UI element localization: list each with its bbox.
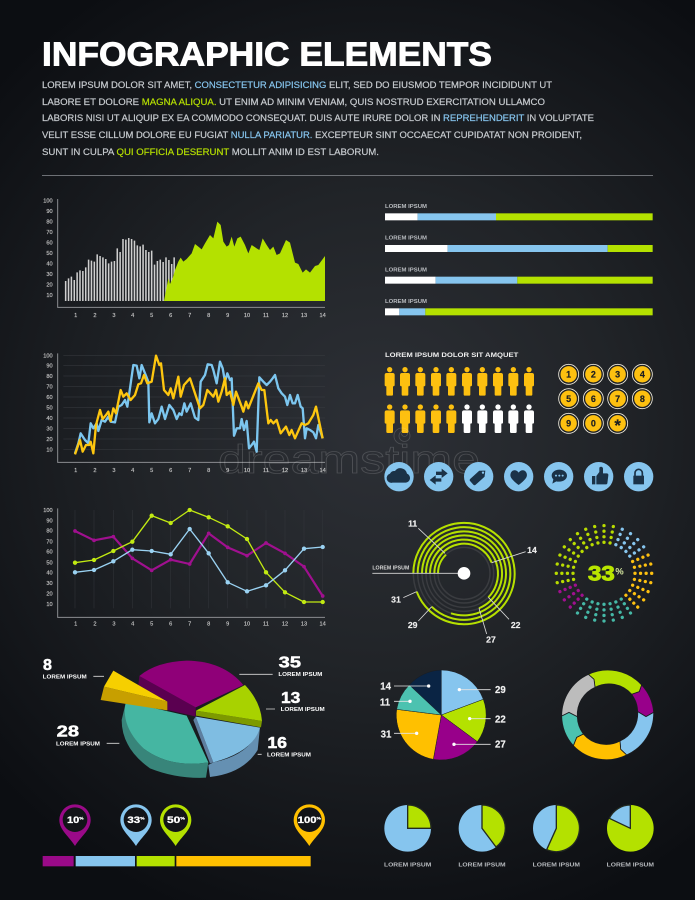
orange dots (626, 555, 652, 607)
y axis labels: 60 (46, 240, 53, 246)
y axis labels: 20 (46, 437, 53, 443)
callout dots (408, 684, 471, 746)
y axis labels: 90 (46, 209, 53, 215)
bar 1 (385, 213, 653, 220)
label 8 (43, 657, 87, 680)
x axis labels: 5 (150, 468, 153, 474)
ring values: 14 (527, 545, 537, 555)
lime series (75, 510, 323, 602)
donut: magenta segment (632, 685, 654, 717)
y axis labels: 100 (43, 353, 53, 359)
chart: three series with markers (43, 508, 326, 628)
y axis labels: 60 (46, 550, 53, 556)
callout values: 31 (381, 729, 392, 740)
x axis labels: 11 (263, 468, 269, 474)
keypad circles (560, 366, 651, 432)
keypad digits: * (614, 416, 621, 435)
watermark: dreamstime (218, 438, 480, 482)
mini pie 1 (384, 805, 431, 852)
ring values: 31 (391, 594, 401, 604)
donut: teal segment (562, 712, 583, 746)
pin: 100 percent: % (317, 816, 322, 821)
donut: orange segment (573, 734, 627, 760)
x axis labels: 8 (207, 622, 210, 628)
ring tracks (413, 523, 515, 624)
y axis labels: 100 (43, 199, 53, 205)
ring arcs (413, 523, 515, 624)
pin: 33 percent: 33 (127, 815, 137, 825)
pin: 50 percent: % (180, 816, 186, 821)
intro text block (42, 80, 594, 157)
keypad digits: 8 (640, 394, 645, 404)
x axis labels: 9 (226, 468, 229, 474)
keypad digits: 5 (566, 394, 571, 404)
yellow slice (101, 671, 167, 710)
segmented donut chart (562, 670, 654, 760)
keypad digits: 1 (566, 370, 571, 380)
x axis labels: 5 (150, 622, 153, 628)
x axis labels: 14 (320, 468, 326, 474)
blue slice (193, 717, 260, 777)
icon: price tag (464, 462, 493, 491)
x axis labels: 5 (150, 313, 153, 319)
pin: 33 percent (120, 804, 152, 846)
callout lines (394, 686, 491, 744)
label 35 (278, 654, 323, 678)
x axis labels: 2 (93, 313, 97, 319)
keypad digits: 9 (566, 419, 571, 429)
grid lines (63, 355, 325, 450)
keypad digits: 4 (640, 370, 645, 380)
ring values: 29 (408, 620, 418, 630)
pin: 10 percent (59, 804, 91, 846)
y axis labels: 50 (46, 560, 53, 566)
label 16: LOREM IPSUM (267, 752, 312, 758)
callout values: 29 (495, 685, 506, 696)
keypad digits: 2 (591, 370, 596, 380)
ring progress chart (372, 518, 537, 644)
mini pie 2 (459, 805, 505, 852)
bar 4 (385, 308, 653, 315)
x axis labels: 4 (131, 313, 134, 319)
ring values: 22 (511, 620, 521, 630)
lime area (164, 222, 325, 301)
teal slice (122, 702, 208, 778)
label 28 (56, 724, 101, 747)
axes (58, 199, 325, 307)
blue line (75, 362, 323, 453)
chart: two line series (43, 353, 326, 474)
mini pie 3 (533, 805, 580, 852)
dotted radial gauge (556, 525, 652, 621)
x axis labels: 11 (263, 313, 269, 319)
label 28: 28 (57, 724, 79, 741)
y axis labels: 60 (46, 395, 53, 401)
y axis labels: 40 (46, 261, 53, 267)
x axis labels: 6 (169, 468, 172, 474)
y axis labels: 80 (46, 374, 53, 380)
keypad digits: 7 (615, 394, 620, 404)
y axis labels: 10 (46, 293, 53, 299)
keypad outer rings (559, 364, 652, 433)
donut: lime segment (588, 670, 642, 694)
label 8: 8 (43, 657, 52, 674)
x axis labels: 4 (131, 622, 134, 628)
lime dots (556, 525, 613, 583)
x axis labels: 7 (188, 468, 191, 474)
label 28: LOREM IPSUM (56, 741, 101, 747)
label 8: LOREM IPSUM (43, 674, 87, 680)
mini pies row (384, 805, 654, 868)
y axis labels: 70 (46, 230, 53, 236)
icon row (384, 462, 653, 491)
pie leader lines (93, 674, 275, 754)
donut: blue segment (620, 712, 654, 755)
label 13 (281, 690, 325, 713)
magenta slice (138, 661, 243, 717)
bar labels: LOREM IPSUM (385, 299, 428, 305)
label 13: LOREM IPSUM (281, 707, 325, 713)
x axis labels: 12 (282, 313, 288, 319)
x axis labels: 3 (112, 313, 116, 319)
x axis labels: 10 (244, 622, 250, 628)
ring values: 11 (408, 518, 417, 528)
x axis labels: 4 (131, 468, 134, 474)
pin: 100 percent: 100 (298, 815, 313, 825)
label 16 (267, 735, 312, 758)
mini pie labels: LOREM IPSUM (607, 862, 654, 868)
y axis labels: 10 (46, 448, 53, 454)
x axis labels: 9 (226, 622, 229, 628)
x axis labels: 13 (301, 468, 307, 474)
x axis labels: 11 (263, 622, 269, 628)
pin: 50 percent (160, 804, 191, 846)
x axis labels: 2 (93, 468, 97, 474)
icon: heart (504, 462, 533, 491)
keypad digits: 3 (615, 370, 620, 380)
intro text block: SUNT IN CULPA QUI OFFICIA DESERUNT MOLLIT ANIM ID EST LABORUM. (42, 147, 379, 157)
label 35: 35 (279, 654, 301, 671)
y axis labels: 30 (46, 272, 53, 278)
x axis labels: 13 (301, 622, 307, 628)
mini pie labels: LOREM IPSUM (384, 862, 432, 868)
y axis labels: 50 (46, 406, 53, 412)
magenta series (75, 531, 323, 596)
bar labels: LOREM IPSUM (385, 236, 428, 242)
yellow line (75, 356, 323, 454)
progress bar (43, 856, 311, 866)
bar labels: LOREM IPSUM (385, 267, 428, 273)
y axis labels: 10 (46, 602, 53, 608)
y axis labels: 80 (46, 219, 53, 225)
y axis labels: 90 (46, 364, 53, 370)
icon: exchange arrows (424, 462, 453, 491)
bar 3 (385, 277, 653, 284)
bar labels (385, 204, 428, 305)
pin: 10 percent: 10 (67, 815, 77, 825)
mini pie labels (384, 862, 654, 868)
mini pie labels: LOREM IPSUM (533, 862, 580, 868)
watermark (218, 428, 480, 482)
blue series (75, 529, 323, 591)
intro text block: VELIT ESSE CILLUM DOLORE EU FUGIAT NULLA PARIATUR. EXCEPTEUR SINT OCCAECAT CUPIDATAT NON PROIDENT, (42, 130, 582, 140)
x axis labels: 9 (226, 313, 229, 319)
vertical grid lines (75, 510, 323, 608)
donut: gray segment (562, 674, 595, 717)
mini pie labels: LOREM IPSUM (458, 862, 506, 868)
heading: LOREM IPSUM DOLOR SIT AMQUET (385, 352, 518, 359)
x axis labels: 10 (244, 468, 250, 474)
callout values: 22 (495, 714, 506, 725)
pin: 10 percent: % (79, 816, 84, 821)
teal dots (577, 599, 631, 621)
y axis labels: 20 (46, 282, 53, 288)
callout values: 11 (380, 698, 391, 709)
ring values: 27 (486, 634, 496, 644)
gauge percentage: 33 (588, 561, 615, 586)
intro text block: LABORIS NISI UT ALIQUIP EX EA COMMODO CONSEQUAT. DUIS AUTE IRURE DOLOR IN REPREHENDERIT IN VOLUPTATE (42, 113, 594, 123)
3D exploded pie chart (43, 654, 325, 778)
label 35: LOREM IPSUM (278, 672, 323, 678)
stacked bars panel (385, 204, 653, 315)
x axis labels: 1 (74, 313, 77, 319)
y axis labels: 100 (43, 508, 53, 514)
label 16: 16 (267, 735, 287, 752)
x axis labels: 7 (188, 313, 191, 319)
y axis labels: 70 (46, 385, 53, 391)
pie slices (396, 670, 486, 760)
y axis labels: 20 (46, 592, 53, 598)
y axis labels: 90 (46, 518, 53, 524)
x axis labels: 14 (320, 313, 326, 319)
title: INFOGRAPHIC ELEMENTS (42, 36, 492, 72)
x axis labels: 8 (207, 468, 210, 474)
people and keypad panel (385, 352, 652, 435)
x axis labels: 1 (74, 622, 77, 628)
icon: speech bubble (544, 462, 573, 491)
map pins and progress bar (43, 804, 325, 866)
magenta dots (560, 585, 582, 607)
y axis labels: 50 (46, 251, 53, 257)
label 13: 13 (281, 690, 300, 707)
icon: thumbs up (584, 462, 613, 491)
y axis labels: 80 (46, 529, 53, 535)
intro text block: LABORE ET DOLORE MAGNA ALIQUA. UT ENIM AD MINIM VENIAM, QUIS NOSTRUD EXERCITATION ULLAMCO (42, 97, 545, 107)
pin: 100 percent (294, 804, 325, 846)
y axis labels: 30 (46, 581, 53, 587)
icon: padlock (624, 462, 653, 491)
axes (58, 508, 325, 617)
mini pie 4 (607, 805, 654, 852)
axes (58, 353, 325, 462)
gauge percentage: % (615, 566, 624, 576)
people row 1 (385, 367, 534, 396)
x axis labels: 6 (169, 622, 172, 628)
white bars (66, 238, 174, 301)
x axis labels: 7 (188, 622, 191, 628)
bar labels: LOREM IPSUM (385, 204, 428, 210)
callout values: 14 (380, 681, 392, 692)
x axis labels: 13 (301, 313, 307, 319)
x axis labels: 12 (282, 468, 288, 474)
y axis labels: 30 (46, 427, 53, 433)
chart: bars and area (43, 199, 326, 319)
x axis labels: 14 (320, 622, 326, 628)
center dot (458, 567, 470, 580)
intro text block: LOREM IPSUM DOLOR SIT AMET, CONSECTETUR ADIPISICING ELIT, SED DO EIUSMOD TEMPOR INCIDIDUNT UT (42, 80, 553, 90)
x axis labels: 12 (282, 622, 288, 628)
y axis labels: 40 (46, 416, 53, 422)
x axis labels: 8 (207, 313, 210, 319)
flat pie chart with callouts (380, 670, 506, 760)
pin: 50 percent: 50 (167, 815, 177, 825)
lime slice (196, 685, 262, 727)
y axis labels: 70 (46, 539, 53, 545)
keypad digits: 0 (591, 419, 596, 429)
gauge percentage (588, 561, 624, 586)
ring label: LOREM IPSUM (372, 565, 410, 571)
leader lines (372, 528, 526, 634)
x axis labels: 6 (169, 313, 172, 319)
pin: 33 percent: % (140, 816, 145, 821)
x axis labels: 3 (112, 622, 116, 628)
x axis labels: 3 (112, 468, 116, 474)
people row 2 (385, 404, 534, 433)
keypad digits: 6 (591, 394, 596, 404)
y axis labels: 40 (46, 571, 53, 577)
callout values: 27 (495, 740, 506, 751)
bar 2 (385, 245, 653, 252)
blue dots (616, 529, 644, 556)
x axis labels: 10 (244, 313, 250, 319)
x axis labels: 1 (74, 468, 77, 474)
icon: cloud (384, 462, 414, 491)
x axis labels: 2 (93, 622, 97, 628)
